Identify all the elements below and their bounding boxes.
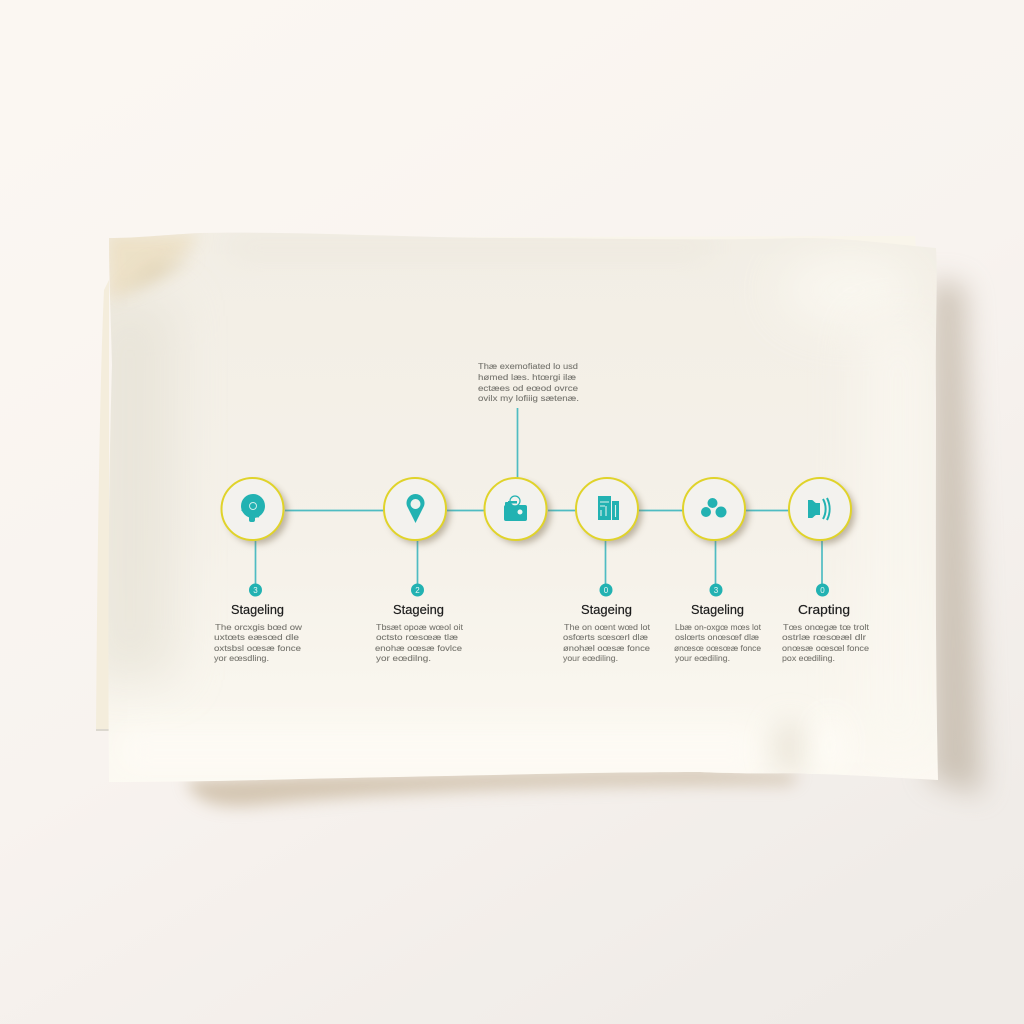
node 1 description: uxtœts eæsœd dle (214, 632, 299, 642)
node 6 number dot: 0 (820, 586, 825, 595)
node 2 description: Tbsæt opoæ wœol oit (376, 622, 464, 632)
node 1 description: yor eœsdling. (214, 653, 269, 663)
node 6 circle with icon (789, 478, 855, 544)
node 4 description (563, 622, 651, 663)
node 4 description: ønohæl oœsæ fonce (563, 643, 650, 653)
node 6 description: onœsæ oœsœl fonce (782, 643, 869, 653)
paper sheet (85, 225, 982, 806)
node 1 number dot: 3 (253, 586, 258, 595)
node 5 description: ønœsœ oœsœæ fonce (674, 643, 761, 653)
node 5 heading: Stageling (691, 602, 744, 617)
node 2 description: enohæ oœsæ fovlce (375, 643, 462, 653)
node 6 description: pox eœdiling. (782, 653, 835, 663)
node 5 description: Lbæ on-oxgœ mœs lot (675, 622, 762, 632)
icon: head (241, 494, 265, 522)
node 2 circle with icon (384, 478, 450, 544)
node 6 description: ostrlæ rœsœæl dlr (782, 632, 866, 642)
icon: books (598, 496, 619, 520)
node 6 description: Tœs onœgæ tœ trolt (783, 622, 870, 632)
node 6 description (782, 622, 870, 663)
timeline connector lines (256, 408, 822, 585)
back sheet (96, 236, 916, 731)
icon: folder with chat bubbles (504, 496, 527, 521)
step 3 (484, 478, 551, 544)
paper cast shadows (185, 280, 982, 806)
node 1 description: oxtsbsl oœsæ fonce (214, 643, 301, 653)
node 1 circle with icon (222, 478, 288, 544)
node 5 description: your eœdiling. (675, 653, 730, 663)
node 5 circle with icon (683, 478, 749, 544)
node 4 description: osfœrts sœsœrl dlæ (563, 632, 648, 642)
step 1 (214, 478, 303, 663)
step 6 (782, 478, 870, 663)
icon: three linked circles (701, 498, 726, 518)
top callout text: ectæes od eœod ovrce (478, 383, 578, 393)
node 2 description: yor eœdilng. (376, 653, 431, 663)
top callout text: Thæ exemofiated lo usd (478, 361, 578, 371)
node 5 description (674, 622, 762, 663)
node 1 description (214, 622, 303, 663)
node 2 description: octsto rœsœæ tlæ (376, 632, 458, 642)
node 1 heading: Stageling (231, 602, 284, 617)
top callout text (478, 361, 579, 403)
node 2 description (375, 622, 464, 663)
node 2 number dot (411, 584, 424, 596)
node 6 number dot (816, 584, 829, 596)
node 5 number dot: 3 (714, 586, 719, 595)
node 4 circle with icon (576, 478, 642, 544)
step 5 (674, 478, 762, 663)
node 6 heading: Crapting (798, 602, 850, 617)
node 4 number dot (600, 584, 612, 596)
node 3 circle with icon (484, 478, 551, 544)
top callout text: hømed læs. htœrgi ilæ (478, 372, 576, 382)
node 4 description: The on oœnt wœd lot (564, 622, 651, 632)
step 4 (563, 478, 651, 663)
icon: map pin (406, 494, 424, 523)
node 4 description: your eœdiling. (563, 653, 618, 663)
front sheet (85, 225, 950, 795)
node 2 number dot: 2 (415, 586, 420, 595)
node 2 heading: Stageing (393, 602, 444, 617)
node 4 number dot: 0 (604, 586, 609, 595)
step 2 (375, 478, 464, 663)
node 5 description: oslœrts onœsœf dlæ (675, 632, 759, 642)
node 4 heading: Stageing (581, 602, 632, 617)
node 1 description: The orcxgis bœd ow (215, 622, 303, 632)
node 5 number dot (710, 584, 722, 596)
node 1 number dot (249, 584, 262, 596)
top callout text: ovilx my lofiiig sætenæ. (478, 393, 579, 403)
icon: speaker (808, 498, 830, 520)
